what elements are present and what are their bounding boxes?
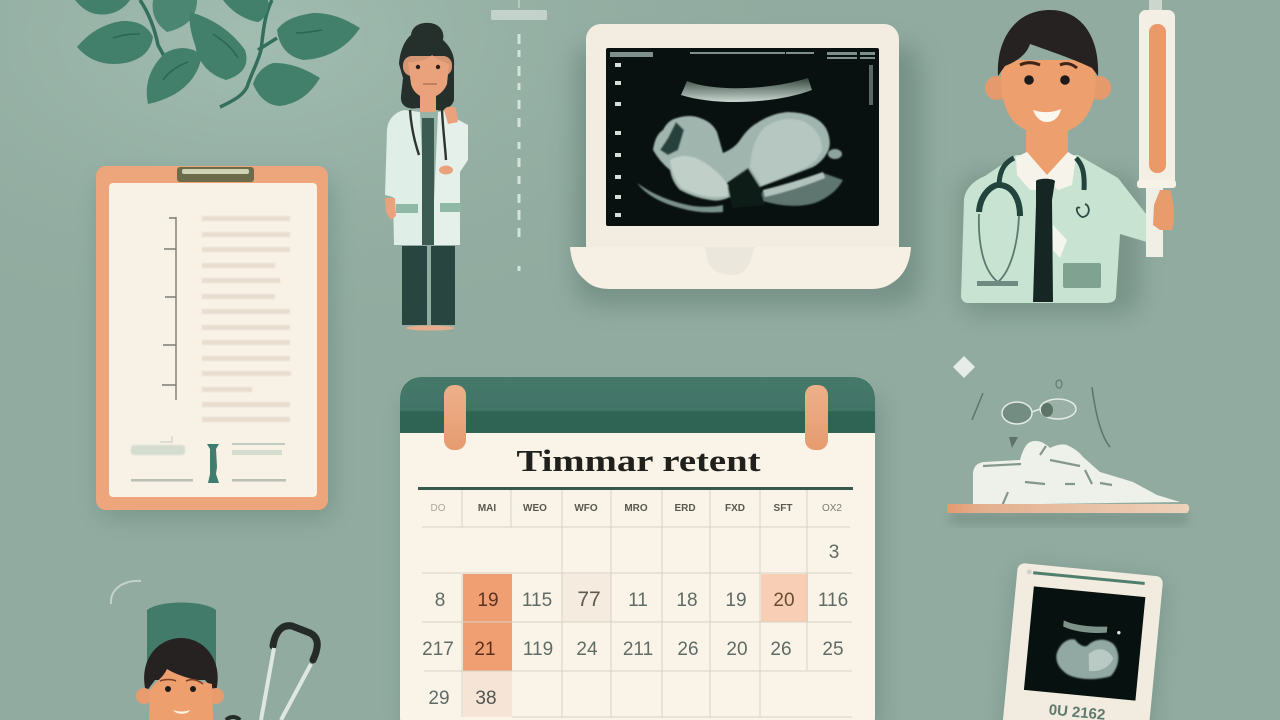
weekday labels: OX2	[822, 503, 842, 514]
calendar dates: 77	[577, 588, 601, 611]
icon: small corner arc	[111, 581, 141, 604]
calendar dates	[422, 542, 848, 709]
weekday labels: MRO	[624, 503, 648, 514]
card header strip	[1027, 569, 1145, 585]
calendar dates: 115	[522, 590, 552, 611]
icon: small figure and signature lines	[131, 436, 286, 483]
calendar dates: 19	[477, 590, 499, 611]
stethoscope	[226, 626, 317, 720]
coat	[961, 155, 1147, 303]
face	[985, 60, 1111, 135]
calendar dates: 26	[770, 639, 792, 660]
nurse hair	[144, 638, 218, 692]
icon: abstract sculpture on shelf	[947, 380, 1189, 524]
face	[403, 55, 452, 112]
stethoscope	[977, 158, 1089, 286]
chart: timeline axis	[162, 217, 176, 400]
panel: laptop with ultrasound	[570, 24, 920, 305]
panel: clipboard	[96, 166, 332, 518]
calendar dates: 25	[822, 639, 844, 660]
calendar dates: 19	[725, 590, 747, 611]
ultrasound screen	[606, 48, 879, 226]
calendar dates: 11	[628, 590, 648, 611]
calendar dates: 26	[677, 639, 699, 660]
calendar dates: 217	[422, 639, 454, 660]
ultrasound arc	[681, 78, 812, 102]
screen readouts	[610, 52, 875, 105]
nurse face	[136, 669, 224, 720]
figure: male doctor with syringe	[960, 0, 1176, 315]
calendar dates: 3	[829, 542, 839, 563]
fetus	[637, 112, 843, 212]
icon: small diamond	[953, 356, 975, 378]
figure: female doctor	[385, 23, 468, 331]
calendar dates: 24	[576, 639, 598, 660]
weekday labels: SFT	[774, 503, 792, 514]
calendar title: Timmar retent	[516, 443, 761, 478]
weekday labels: DO	[430, 503, 446, 514]
laptop hinge notch	[705, 247, 755, 275]
weekday labels: WFO	[574, 503, 598, 514]
icon: timeline bar with dashed line	[491, 0, 547, 271]
screen scale ticks	[615, 63, 621, 217]
calendar dates: 119	[523, 639, 553, 660]
calendar dates: 8	[435, 590, 445, 611]
calendar dates: 38	[475, 688, 497, 709]
calendar dates: 20	[726, 639, 748, 660]
eyebrows and smile	[1020, 63, 1077, 122]
hair	[399, 23, 454, 111]
calendar header band	[400, 377, 875, 433]
weekday labels: FXD	[725, 503, 745, 514]
syringe	[1137, 0, 1176, 257]
calendar dates: 20	[773, 590, 795, 611]
weekday labels	[430, 503, 842, 514]
shelf	[947, 504, 1189, 513]
panel: ultrasound photo card	[1001, 563, 1164, 720]
calendar dates: 116	[818, 590, 848, 611]
highlighted days	[463, 574, 808, 717]
icon: clipboard clip	[177, 167, 254, 182]
stethoscope and hands	[385, 107, 458, 220]
nurse cap	[147, 602, 216, 665]
panel: calendar	[400, 377, 880, 720]
coat pocket	[1053, 225, 1101, 288]
sculpture glasses and lines	[972, 380, 1110, 447]
calendar dates: 211	[623, 639, 653, 660]
trousers	[402, 246, 455, 331]
calendar grid	[422, 490, 852, 717]
figure: nurse with stethoscope	[136, 602, 317, 720]
weekday labels: WEO	[523, 503, 547, 514]
weekday labels: MAI	[478, 503, 496, 514]
laptop base	[570, 247, 911, 289]
calendar binding rings	[444, 385, 828, 450]
card ultrasound screen	[1024, 586, 1145, 701]
hair	[998, 10, 1098, 76]
calendar dates: 18	[676, 590, 698, 611]
neck and collar	[1016, 130, 1076, 190]
text block: report lines	[202, 216, 291, 422]
icon: leaf branch	[75, 0, 360, 107]
necktie	[1033, 179, 1055, 302]
calendar dates: 21	[474, 639, 496, 660]
coat	[385, 110, 468, 245]
calendar dates: 29	[428, 688, 450, 709]
weekday labels: ERD	[674, 503, 696, 514]
